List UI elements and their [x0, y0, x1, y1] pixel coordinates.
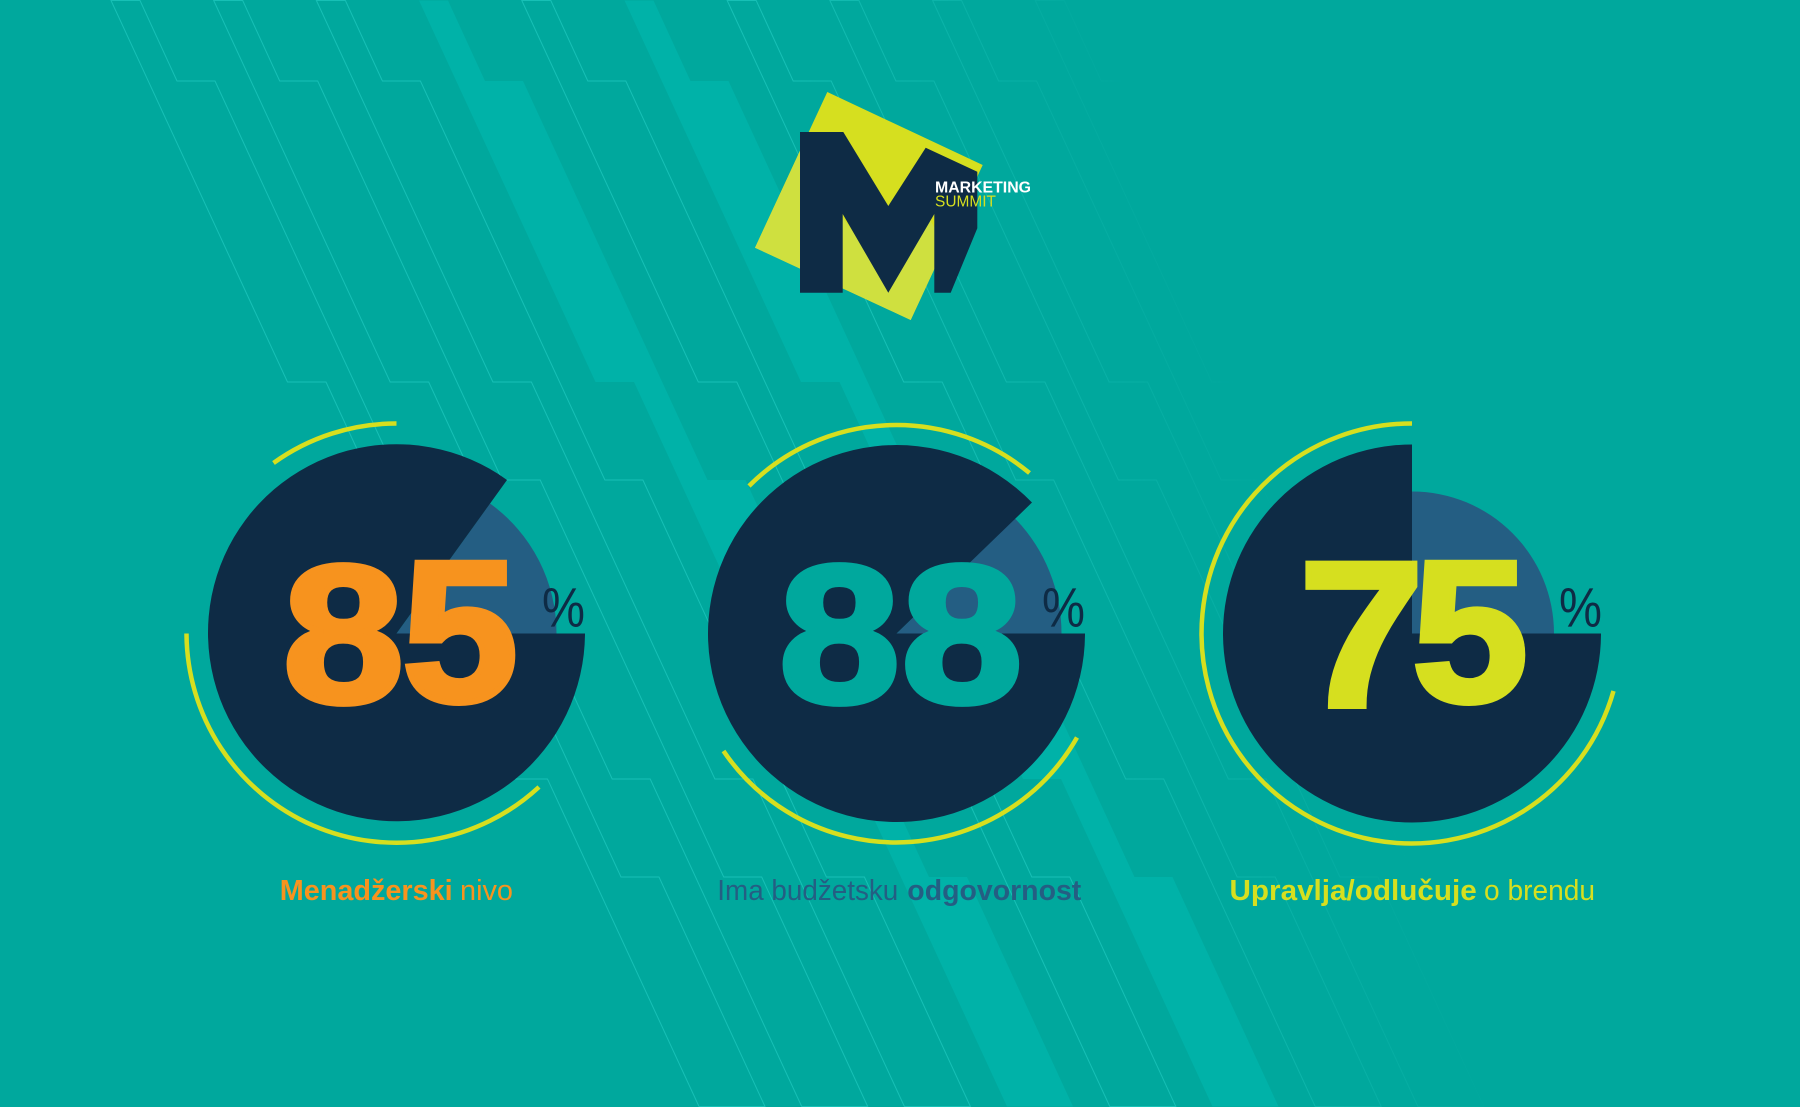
main pie — [708, 445, 1085, 822]
inner sector — [896, 518, 1062, 634]
stat: 88% Ima budžetsku odgovornost — [708, 425, 1085, 907]
inner sector — [1412, 492, 1554, 634]
logo: Marketing Summit — [755, 92, 1031, 320]
label — [1230, 875, 1595, 907]
logo wordmark: SUMMIT — [935, 194, 997, 211]
inner sector — [396, 504, 557, 634]
stat: 75% Upravlja/odlučuje o brendu — [1202, 423, 1614, 907]
main pie — [1223, 444, 1601, 822]
outer arc — [1202, 423, 1614, 843]
number: 8 — [283, 525, 404, 744]
logo wordmark — [935, 180, 1031, 211]
number: 5 — [402, 519, 518, 744]
label: Menadžerski — [280, 875, 453, 907]
number: 8 — [902, 525, 1022, 744]
label: nivo — [460, 875, 513, 907]
stat: 85% Menadžerski nivo — [186, 423, 585, 907]
logo letter M — [800, 132, 977, 293]
number: 7 — [1299, 519, 1424, 750]
logo wordmark: MARKETING — [935, 180, 1031, 197]
outer arcs — [724, 425, 1077, 842]
label — [717, 875, 1082, 907]
label: o brendu — [1484, 875, 1595, 907]
label: odgovornost — [907, 875, 1082, 907]
number — [283, 519, 518, 744]
label: Ima budžetsku — [717, 875, 898, 907]
number — [1299, 519, 1528, 750]
number — [779, 525, 1022, 744]
percent sign: % — [542, 576, 585, 638]
logo square — [755, 92, 983, 320]
percent sign: % — [1559, 576, 1602, 638]
outer arcs — [186, 423, 539, 843]
number: 5 — [1412, 519, 1528, 744]
main pie — [208, 444, 585, 821]
percent sign: % — [1042, 576, 1085, 638]
label: Upravlja/odlučuje — [1230, 875, 1477, 907]
number: 8 — [779, 525, 900, 744]
